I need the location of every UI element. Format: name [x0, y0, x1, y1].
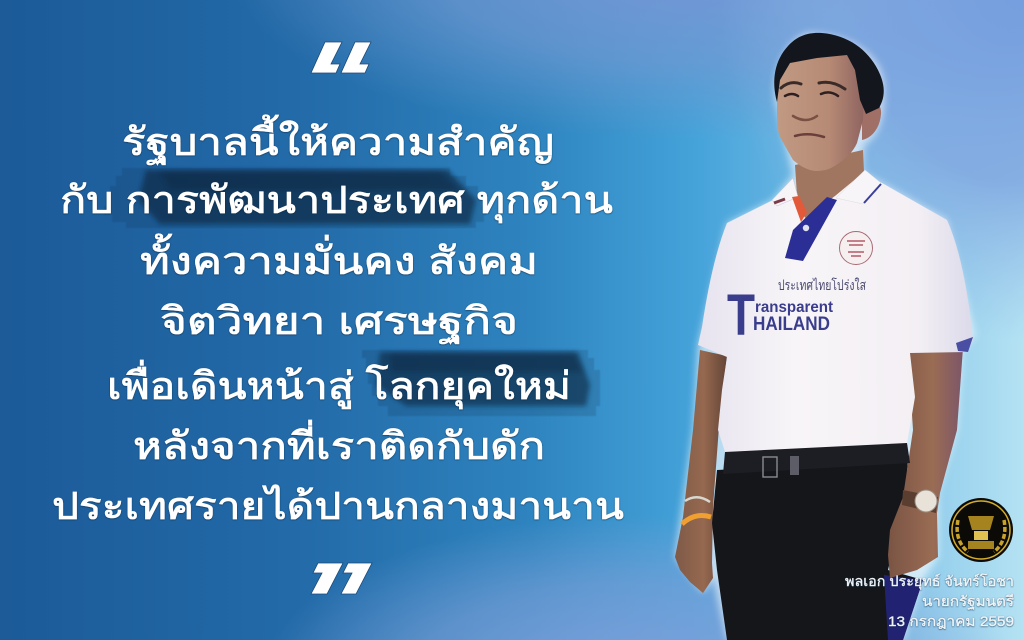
figure glow	[675, 33, 975, 640]
right arm	[888, 348, 963, 578]
red inner placket	[792, 196, 807, 222]
THAILAND: HAILAND	[753, 314, 830, 335]
polo shirt	[698, 172, 973, 452]
shirt print	[727, 277, 866, 348]
placket button	[803, 225, 809, 231]
hair	[774, 33, 884, 114]
line 1: รัฐบาลนี้ให้ความสำคัญ	[122, 114, 554, 165]
facial features	[781, 82, 845, 137]
left arm	[675, 350, 727, 593]
bracelet	[685, 497, 710, 502]
wristwatch	[902, 490, 938, 513]
highlight brush behind line 2	[104, 168, 486, 228]
opening quotation mark	[311, 42, 371, 73]
belt	[723, 443, 910, 474]
ear	[862, 101, 881, 140]
closing quotation mark	[311, 563, 372, 594]
blue placket	[785, 197, 837, 261]
big T: T	[727, 283, 755, 348]
line 3: ทั้งความมั่นคง สังคม	[140, 233, 538, 283]
Thai slogan: ประเทศไทยโปร่งใส	[778, 277, 866, 293]
line 2: กับ การพัฒนาประเทศ ทุกด้าน	[60, 180, 613, 223]
line 6: หลังจากที่เราติดกับดัก	[133, 420, 545, 468]
orange wristband	[682, 516, 711, 524]
line 4: จิตวิทยา เศรษฐกิจ	[160, 301, 518, 344]
name: พลเอก ประยุทธ์ จันทร์โอชา	[845, 573, 1014, 590]
person figure	[675, 33, 975, 640]
government seal	[949, 498, 1013, 562]
line 5: เพื่อเดินหน้าสู่ โลกยุคใหม่	[107, 360, 571, 409]
collar	[772, 170, 881, 206]
line 7: ประเทศรายได้ปานกลางมานาน	[52, 485, 624, 528]
sleeve cuff	[956, 337, 973, 352]
trousers	[712, 460, 923, 640]
belt buckle	[763, 456, 799, 477]
neck	[795, 150, 864, 218]
quote text	[52, 114, 624, 528]
chest badge	[840, 232, 872, 264]
trousers shadow	[884, 575, 923, 640]
date: 13 กรกฎาคม 2559	[888, 613, 1014, 629]
position: นายกรัฐมนตรี	[922, 593, 1015, 610]
attribution text	[845, 573, 1015, 629]
face	[777, 52, 864, 171]
highlight brush behind line 5	[362, 350, 600, 416]
Transparent: ransparent	[755, 299, 834, 316]
